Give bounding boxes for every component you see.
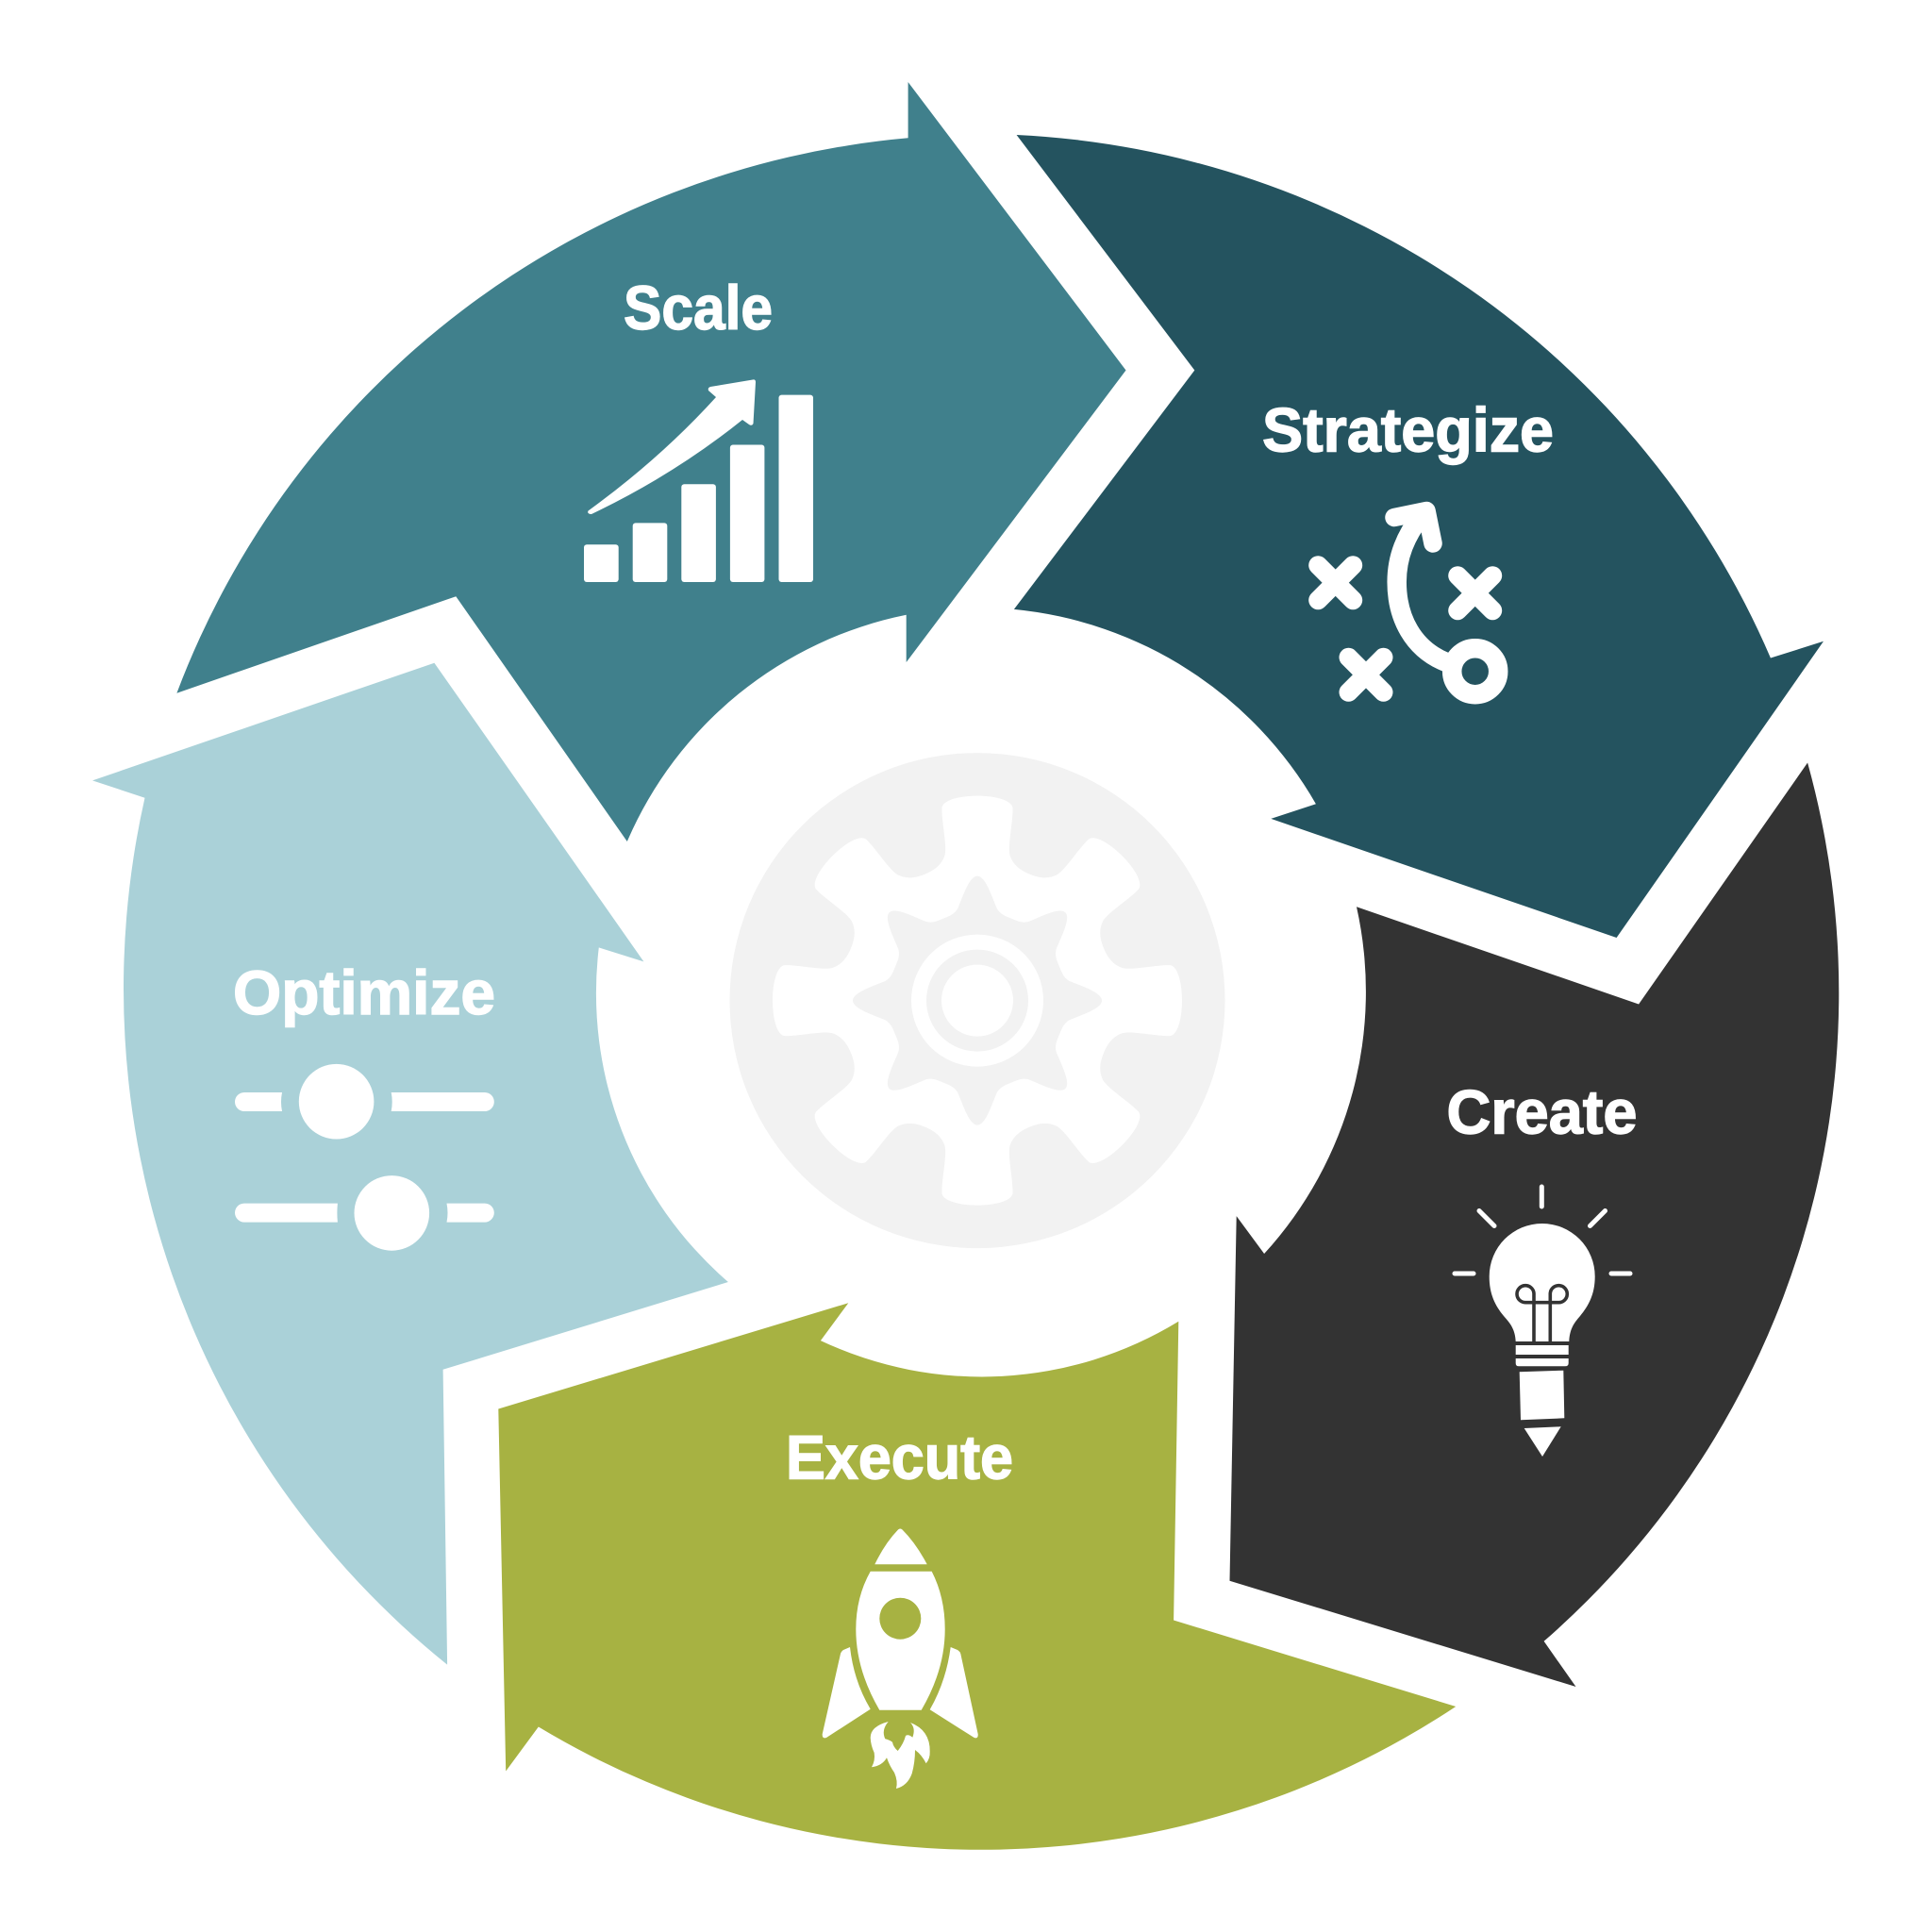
panel: Strategize arrow: [1014, 135, 1824, 938]
icon: light bulb pencil: [1455, 1187, 1630, 1457]
icon: playbook diagram: [1318, 511, 1498, 694]
panel: Create arrow: [1230, 762, 1839, 1687]
heading: Scale: Scale: [624, 273, 773, 342]
icon: rocket: [823, 1528, 978, 1789]
icon: sliders: [235, 1064, 494, 1251]
heading: Create: Create: [1447, 1077, 1638, 1147]
panel: Scale arrow: [176, 82, 1125, 841]
central gear badge: [730, 753, 1224, 1248]
heading: Optimize: Optimize: [233, 958, 495, 1027]
icon: growth bars with arrow: [584, 379, 813, 582]
heading: Execute: Execute: [786, 1422, 1013, 1491]
heading: Strategize: Strategize: [1262, 395, 1554, 465]
panel: Execute arrow: [498, 1303, 1456, 1850]
panel: Optimize arrow: [92, 663, 728, 1665]
